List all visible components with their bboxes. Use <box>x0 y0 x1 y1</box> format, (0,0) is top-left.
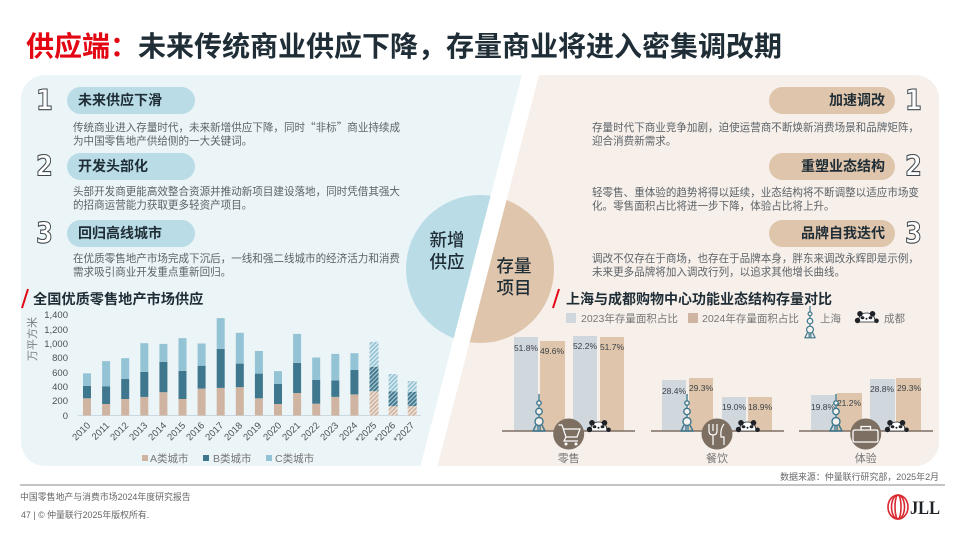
legend: C类城市 <box>275 452 314 465</box>
legend <box>142 452 314 465</box>
right chart legend: 2023年存量面积占比 <box>581 312 678 325</box>
icon: cart <box>558 425 580 441</box>
x axis labels: 2010 <box>70 420 93 443</box>
item 2 number: 2 <box>36 150 53 184</box>
item 1 number: 1 <box>36 84 53 118</box>
x axis labels: 2022 <box>299 420 322 443</box>
x axis labels: 2018 <box>222 420 245 443</box>
group: dining: 28.4% <box>662 386 686 396</box>
item 1 heading: 加速调改 <box>829 92 885 108</box>
group: dining: 18.9% <box>748 402 772 412</box>
x axis labels: 2011 <box>90 420 112 443</box>
legend: B类城市 <box>213 452 252 465</box>
bars <box>83 318 417 416</box>
item 1 text: 存量时代下商业竞争加剧，迫使运营商不断焕新消费场景和品牌矩阵， <box>592 122 919 134</box>
group: experience: 19.8% <box>811 402 835 412</box>
group: retail: 零售 <box>558 451 580 465</box>
x axis labels: 2013 <box>127 420 150 443</box>
y axis labels <box>44 310 68 422</box>
item 2 text: 的招商运营能力获取更多轻资产项目。 <box>73 198 252 212</box>
item 1 text: 传统商业进入存量时代，未来新增供应下降，同时“非标”商业持续成 <box>73 120 400 135</box>
x axis labels: 2014 <box>146 420 169 443</box>
right chart legend: 成都 <box>884 313 905 325</box>
legend: A类城市 <box>150 452 189 465</box>
item 3 text: 未来更多品牌将加入调改行列，以追求其他增长曲线。 <box>592 266 845 278</box>
right chart legend: 上海 <box>820 312 841 325</box>
title: 供应端：未来传统商业供应下降，存量商业将进入密集调改期 <box>26 31 782 62</box>
data source: 数据来源：仲量联行研究部，2025年2月 <box>780 471 939 482</box>
panel: existing projects <box>438 75 939 466</box>
x axis labels: 2019 <box>241 420 264 443</box>
x axis labels: 2015 <box>165 420 188 443</box>
x axis labels: *2026 <box>373 420 398 446</box>
right chart legend: 2024年存量面积占比 <box>702 312 799 325</box>
circle: new supply half <box>406 195 490 338</box>
group: dining: 餐饮 <box>706 451 728 465</box>
circle label: new supply: 供应 <box>430 252 464 272</box>
y axis labels: 1,000 <box>44 339 68 350</box>
group: retail: 51.8% <box>514 343 538 353</box>
group: retail: 52.2% <box>573 341 597 351</box>
y axis labels: 0 <box>63 411 68 422</box>
group: retail: 49.6% <box>540 346 564 356</box>
x axis labels: 2023 <box>318 420 341 443</box>
item 1 number: 1 <box>905 84 922 118</box>
group: dining <box>651 378 784 465</box>
x axis labels: 2016 <box>184 420 207 443</box>
item 1 text: 为中国零售地产供给侧的一大关键词。 <box>73 134 252 148</box>
item 2 heading <box>67 153 195 180</box>
circle: existing projects half <box>470 200 554 343</box>
x axis labels: 2021 <box>280 420 303 443</box>
group: dining: 19.0% <box>722 402 746 412</box>
y axis labels: 800 <box>52 353 68 364</box>
item 3 heading <box>67 220 195 247</box>
group: experience: 29.3% <box>897 383 921 393</box>
circle label: existing projects: 存量 <box>496 256 532 276</box>
item 1 heading <box>769 87 895 114</box>
item 2 text: 轻零售、重体验的趋势将得以延续，业态结构将不断调整以适应市场变 <box>592 187 919 199</box>
left chart heading: 全国优质零售地产市场供应 <box>33 291 203 308</box>
item 1 heading: 未来供应下滑 <box>78 92 162 108</box>
item 3 number: 3 <box>905 217 922 251</box>
item 2 heading: 开发头部化 <box>78 158 148 174</box>
item 1 text: 迎合消费新需求。 <box>592 134 676 148</box>
group: experience: 体验 <box>855 451 877 465</box>
group: dining: 29.3% <box>689 383 713 393</box>
item 3 heading: 回归高线城市 <box>78 225 162 241</box>
item 3 heading: 品牌自我迭代 <box>801 225 885 241</box>
panel: new supply <box>21 75 522 466</box>
y axis labels: 1,200 <box>44 325 68 336</box>
y axis labels: 200 <box>52 396 68 407</box>
group: experience: 21.2% <box>837 398 861 408</box>
circle label: existing projects: 项目 <box>496 278 532 298</box>
group: retail <box>502 336 635 465</box>
y axis labels: 400 <box>52 382 68 393</box>
item 3 text: 调改不仅存在于商场，也存在于品牌本身，胖东来调改永辉即是示例， <box>592 253 919 265</box>
stacked bar chart <box>25 310 421 465</box>
group: experience <box>799 378 933 465</box>
y axis title: 万平方米 <box>25 317 39 361</box>
item 2 text: 化。零售面积占比将进一步下降，体验占比将上升。 <box>592 200 835 212</box>
right chart legend <box>566 306 905 338</box>
x axis labels: 2020 <box>261 420 284 443</box>
x axis labels: 2017 <box>203 420 226 443</box>
item 2 heading: 重塑业态结构 <box>801 158 885 174</box>
item 3 text: 需求吸引商业开发重点重新回归。 <box>73 266 231 278</box>
item 2 heading <box>769 153 895 180</box>
item 3 text: 在优质零售地产市场完成下沉后，一线和强二线城市的经济活力和消费 <box>73 253 400 265</box>
JLL logo: JLL <box>910 498 940 519</box>
JLL logo <box>888 495 940 519</box>
left list <box>36 84 400 279</box>
footer copyright: 47 | © 仲量联行2025年版权所有. <box>21 509 149 520</box>
item 3 heading <box>769 220 895 247</box>
item 2 text: 头部开发商更能高效整合资源并推动新项目建设落地，同时凭借其强大 <box>73 186 400 198</box>
x axis labels: *2025 <box>354 420 379 446</box>
item 2 number: 2 <box>905 150 922 184</box>
footer report name: 中国零售地产与消费市场2024年度研究报告 <box>20 491 191 502</box>
group: retail: 51.7% <box>600 342 624 352</box>
right list <box>592 84 922 279</box>
y axis labels: 600 <box>52 368 68 379</box>
x axis labels <box>70 420 417 446</box>
circle label: new supply: 新增 <box>430 230 464 250</box>
x axis labels: 2012 <box>108 420 131 443</box>
y axis labels: 1,400 <box>44 310 68 321</box>
right chart heading: 上海与成都购物中心功能业态结构存量对比 <box>566 291 832 307</box>
icon: fork and knife <box>709 424 724 445</box>
group: experience: 28.8% <box>870 384 894 394</box>
x axis labels: *2027 <box>392 420 417 446</box>
item 1 heading <box>67 87 195 114</box>
x axis labels: 2024 <box>337 420 360 443</box>
icon: bag <box>853 426 878 442</box>
item 3 number: 3 <box>36 217 53 251</box>
